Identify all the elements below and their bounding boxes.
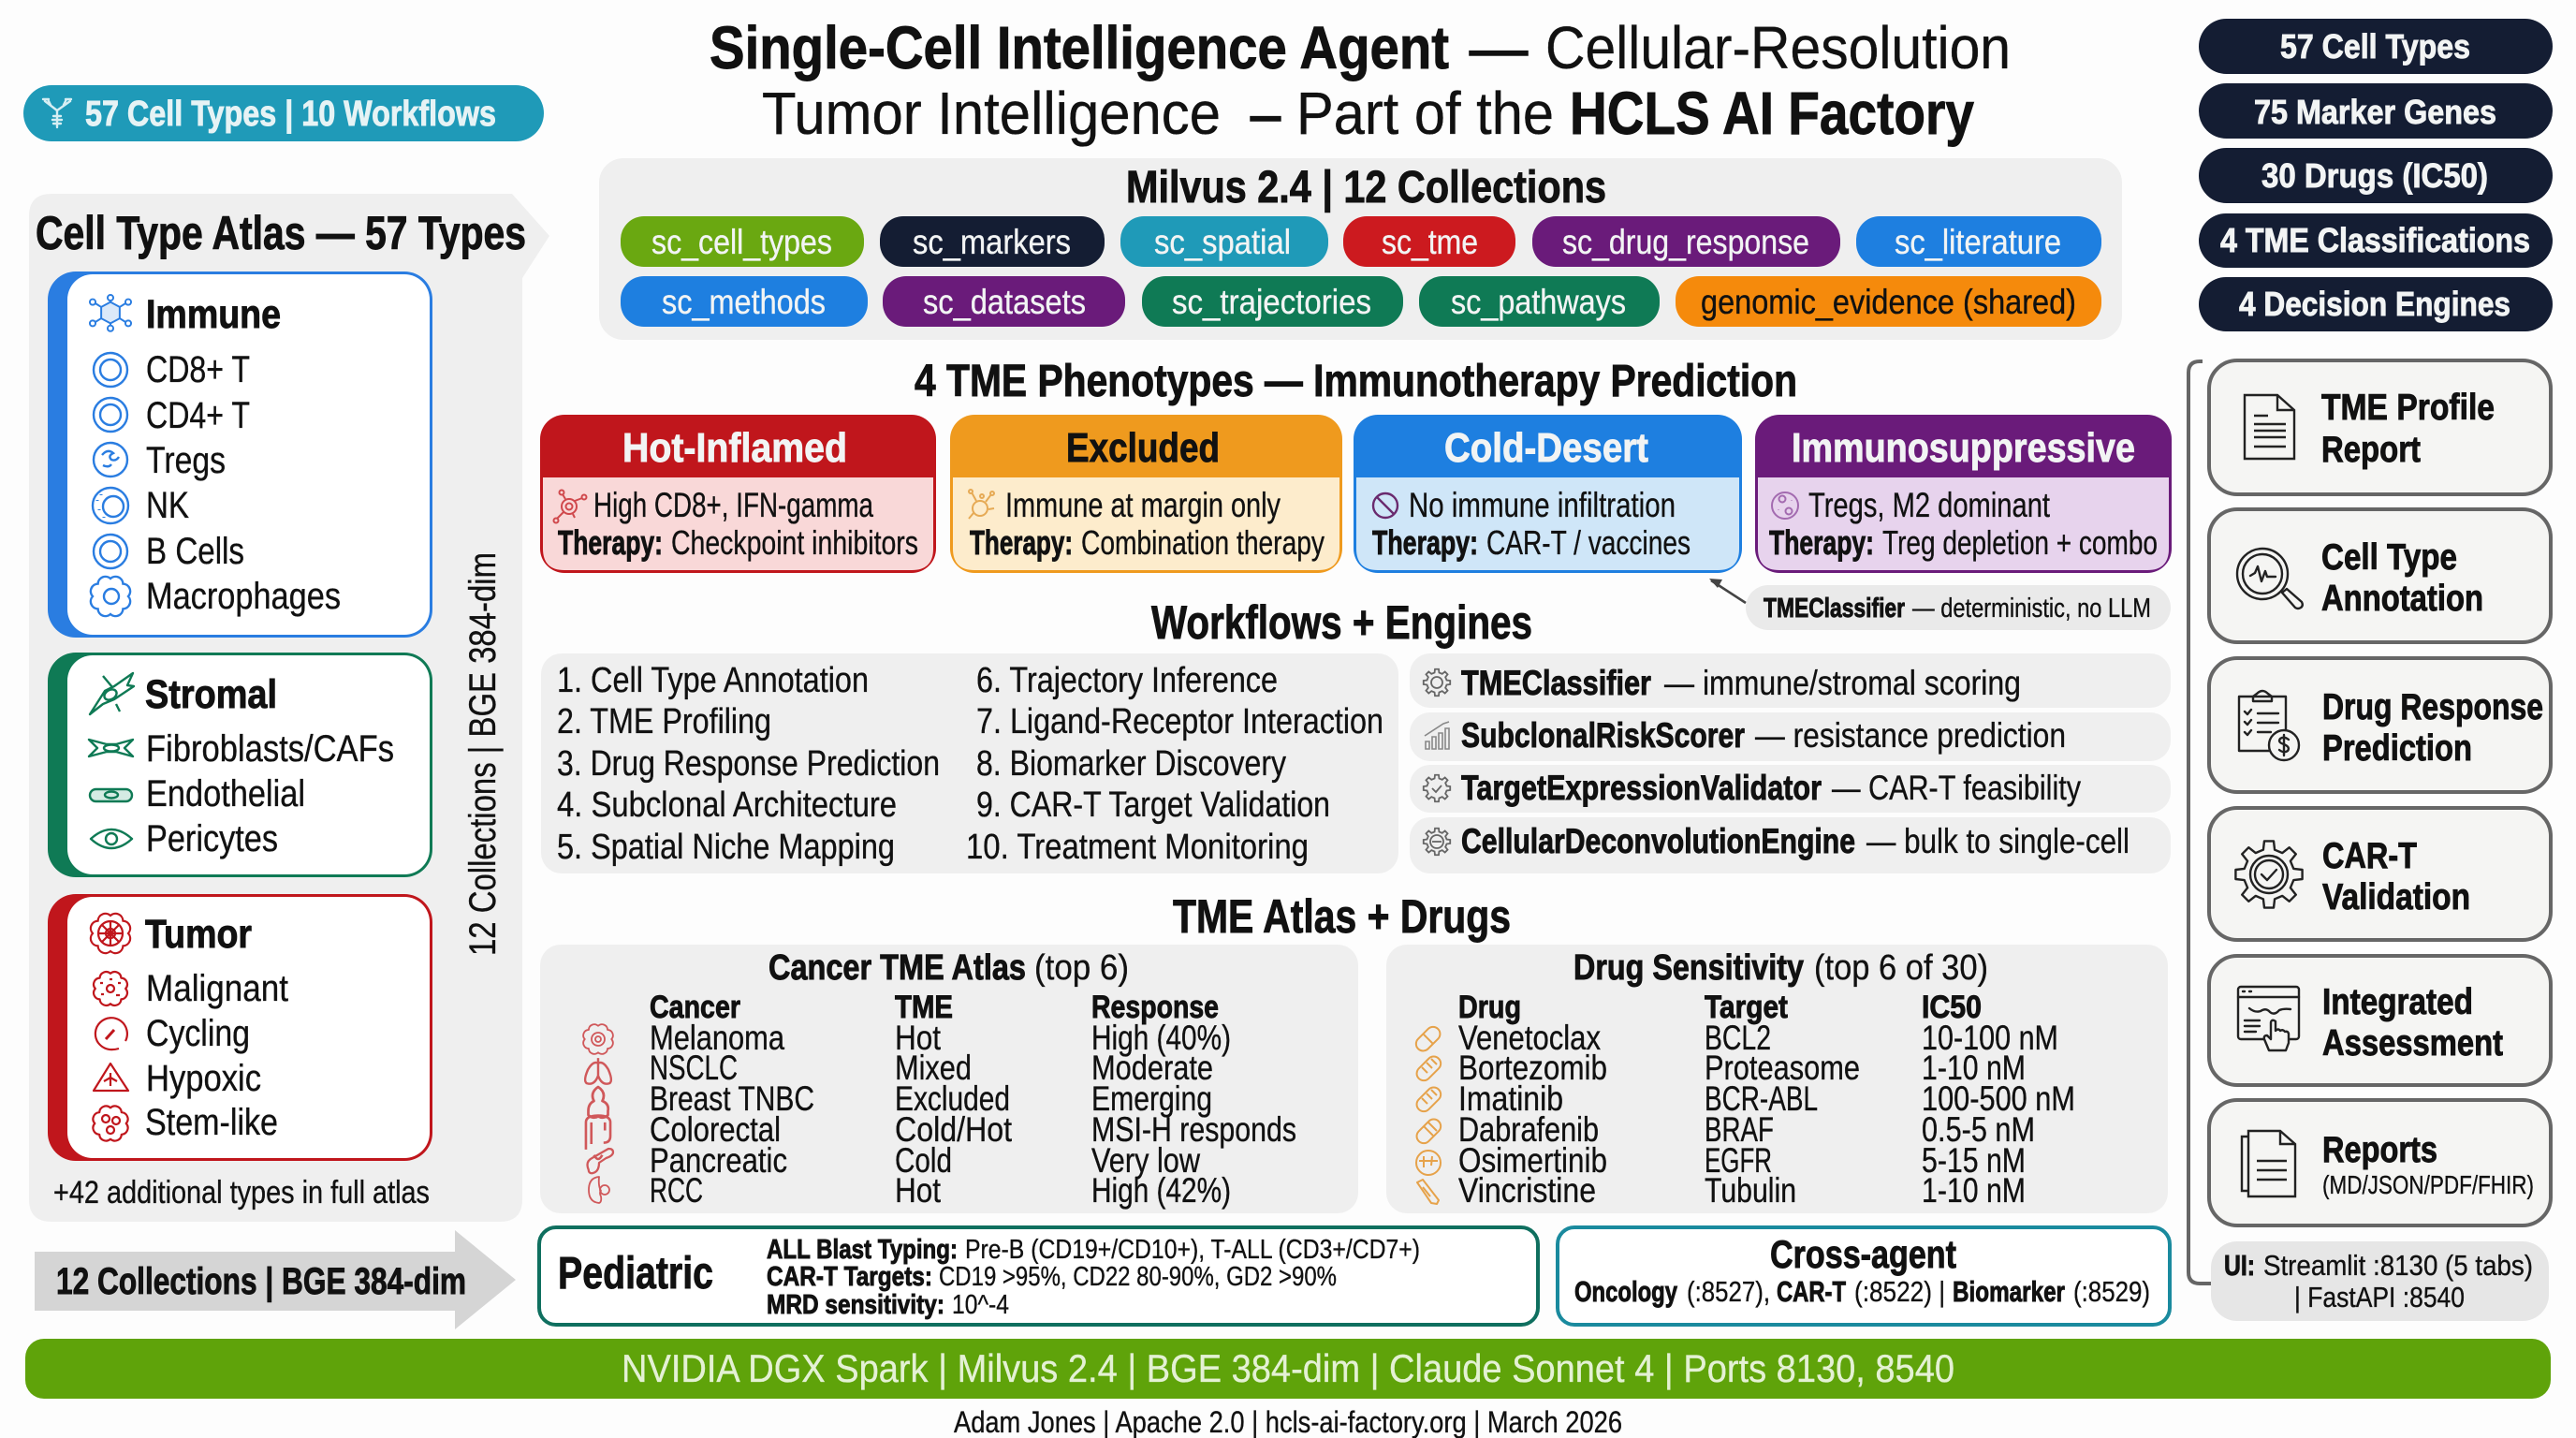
card: excluded: Combination therapy — [1081, 523, 1325, 562]
panel: workflows list: 8. Biomarker Discovery — [976, 744, 1286, 784]
table: cancer: High (40%) — [1091, 1019, 1231, 1057]
table: cancer: Hot — [895, 1019, 942, 1057]
table: cancer: Emerging — [1091, 1079, 1212, 1118]
panel: drug sensitivity: Drug Sensitivity — [1573, 948, 1804, 988]
card: cold-desert: No immune infiltration — [1409, 486, 1676, 524]
pill: UI ports: UI: — [2224, 1249, 2255, 1282]
panel: milvus collections — [599, 158, 2122, 340]
table: drugs: Osimertinib — [1458, 1141, 1607, 1180]
panel: cross-agent: Biomarker — [1953, 1275, 2065, 1308]
card: excluded — [950, 415, 1342, 573]
list: tumor cell types: Stem-like — [145, 1102, 278, 1143]
card: excluded: Immune at margin only — [1005, 486, 1281, 524]
table: drugs: 0.5-5 nM — [1922, 1110, 2035, 1149]
list: stromal cell types — [89, 728, 394, 859]
table: cancer: High (42%) — [1091, 1171, 1231, 1210]
card: immune: Immune — [146, 292, 281, 337]
engine: SubclonalRiskScorer: — resistance prediction — [1755, 716, 2066, 755]
icons: organs — [583, 1024, 613, 1203]
icon: inflamed cell — [554, 491, 586, 522]
panel: cancer TME atlas — [540, 945, 1358, 1213]
table: drugs: 5-15 nM — [1922, 1141, 2026, 1180]
pill: genomic_evidence: genomic_evidence (shared) — [1701, 283, 2076, 321]
bracket: outputs — [2188, 361, 2213, 1284]
panel: cross-agent: Cross-agent — [1770, 1232, 1956, 1276]
card: cold-desert: CAR-T / vaccines — [1486, 523, 1690, 562]
panel: workflows list: 5. Spatial Niche Mapping — [557, 828, 895, 867]
panel: workflows list: 4. Subclonal Architecture — [557, 785, 897, 825]
heading: TME phenotypes: 4 TME Phenotypes — Immunotherapy Prediction — [915, 357, 1797, 406]
callout: TMEClassifier: TMEClassifier — [1764, 594, 1905, 624]
table: cancer — [650, 990, 1296, 1210]
card: cell type annotation — [2209, 509, 2551, 642]
table: drugs: BCL2 — [1705, 1019, 1771, 1057]
icon: magnifier — [2237, 549, 2303, 609]
callout: TMEClassifier: — deterministic, no LLM — [1912, 594, 2151, 624]
panel: cross-agent: (:8522) | — [1854, 1275, 1945, 1308]
panel: drug sensitivity: (top 6 of 30) — [1814, 948, 1988, 988]
pill: sc_datasets — [883, 276, 1125, 327]
pill: genomic_evidence — [1676, 276, 2101, 327]
table: cancer: Cold — [895, 1141, 952, 1180]
table: drugs: BCR-ABL — [1705, 1079, 1818, 1118]
arrow: classifier to phenotypes — [1709, 579, 1746, 603]
card: hot-inflamed: Therapy: — [558, 523, 663, 562]
list: immune cell types: CD8+ T — [146, 349, 250, 390]
list: tumor cell types: Malignant — [146, 968, 288, 1009]
table: cancer: RCC — [650, 1171, 703, 1210]
table: cancer: Excluded — [895, 1079, 1010, 1118]
pill: sc_trajectories — [1142, 276, 1403, 327]
panel: workflows list: 10. Treatment Monitoring — [966, 828, 1309, 867]
table: drugs: Tubulin — [1705, 1171, 1796, 1210]
title: – — [1251, 80, 1281, 147]
heading: workflows and engines: Workflows + Engines — [1151, 596, 1532, 649]
table: drugs: 100-500 nM — [1922, 1079, 2075, 1118]
icon: stromal cell — [90, 673, 134, 714]
icon: stacked documents — [2242, 1131, 2295, 1196]
card: integrated assessment: Integrated — [2322, 982, 2473, 1022]
pill: UI ports: | FastAPI :8540 — [2294, 1281, 2465, 1313]
card: immunosuppressive: Treg depletion + combo — [1882, 523, 2158, 562]
panel: drug sensitivity — [1386, 945, 2168, 1213]
title: — — [1470, 14, 1528, 81]
card: tumor: Tumor — [145, 912, 252, 957]
list: tumor cell types: Cycling — [146, 1013, 250, 1054]
icon: document — [2245, 395, 2294, 459]
icon: immune cell — [90, 295, 131, 331]
card: CAR-T validation: Validation — [2322, 877, 2470, 917]
engine: CellularDeconvolutionEngine: — bulk to single-cell — [1866, 822, 2130, 860]
panel: pediatric: ALL Blast Typing: — [767, 1235, 958, 1265]
icon: tumor cell — [91, 914, 130, 953]
table: cancer: Breast TNBC — [650, 1079, 814, 1118]
pill: sc_literature — [1856, 216, 2101, 267]
card: hot-inflamed: High CD8+, IFN-gamma — [593, 486, 873, 524]
stat: decision engines: 4 Decision Engines — [2239, 285, 2510, 323]
engine: CellularDeconvolutionEngine — [1410, 817, 2171, 873]
table: drugs — [1458, 990, 2075, 1210]
card: TME profile report — [2209, 360, 2551, 494]
card: excluded: Excluded — [1066, 425, 1220, 471]
table: drugs: Bortezomib — [1458, 1049, 1607, 1087]
card: cell type annotation: Annotation — [2321, 579, 2483, 619]
table: drugs: EGFR — [1705, 1141, 1772, 1180]
stat: TME classifications — [2199, 213, 2553, 268]
pill: sc_drug_response — [1532, 216, 1840, 267]
card: tumor — [48, 894, 432, 1161]
card: stromal: Stromal — [145, 672, 277, 717]
list: immune cell types: Macrophages — [146, 576, 341, 617]
panel: workflows list — [541, 653, 1398, 873]
title: HCLS AI Factory — [1570, 80, 1974, 147]
panel: pediatric: MRD sensitivity: — [767, 1290, 944, 1320]
icon: excluded cell — [969, 490, 994, 519]
icon: branching cell — [43, 99, 71, 127]
card: cell type annotation: Cell Type — [2321, 537, 2457, 578]
callout: TMEClassifier — [1746, 585, 2171, 630]
panel: cross-agent — [1558, 1227, 2170, 1325]
panel: pediatric: Pediatric — [558, 1249, 713, 1299]
engine: SubclonalRiskScorer: SubclonalRiskScorer — [1461, 716, 1745, 755]
table: cancer: Moderate — [1091, 1049, 1213, 1087]
card: cold-desert: Cold-Desert — [1444, 425, 1648, 471]
engine: TMEClassifier: TMEClassifier — [1461, 664, 1651, 702]
panel: workflows list: 6. Trajectory Inference — [976, 661, 1278, 700]
panel: workflows list: 7. Ligand-Receptor Interaction — [976, 702, 1383, 741]
table: cancer: Melanoma — [650, 1019, 784, 1057]
title: Cellular-Resolution — [1545, 14, 2011, 81]
heading: TME atlas and drugs: TME Atlas + Drugs — [1173, 890, 1511, 943]
heading: cell type atlas: Cell Type Atlas — 57 Types — [36, 207, 526, 259]
card: immunosuppressive: Therapy: — [1769, 523, 1874, 562]
table: drugs: 1-10 nM — [1922, 1171, 2026, 1210]
footer bar — [25, 1339, 2551, 1399]
card: TME profile report: TME Profile — [2321, 388, 2495, 428]
panel: cancer TME atlas: (top 6) — [1034, 948, 1129, 988]
pill: UI ports: Streamlit :8130 (5 tabs) — [2263, 1249, 2533, 1282]
panel: pediatric: 10^-4 — [952, 1290, 1009, 1320]
table: drugs: IC50 — [1922, 990, 1982, 1025]
panel: cross-agent: (:8529) — [2073, 1275, 2150, 1308]
icon: no entry — [1373, 493, 1398, 518]
icon: clipboard with dollar — [2239, 691, 2299, 760]
card: immune — [48, 271, 432, 638]
pill: sc_markers — [880, 216, 1105, 267]
table: cancer: NSCLC — [650, 1049, 738, 1087]
table: cancer: MSI-H responds — [1091, 1110, 1296, 1149]
table: drugs: Dabrafenib — [1458, 1110, 1599, 1149]
pill: sc_spatial — [1120, 216, 1328, 267]
table: cancer: Hot — [895, 1171, 942, 1210]
list: tumor cell types: Hypoxic — [146, 1058, 261, 1099]
table: drugs: Target — [1705, 990, 1788, 1025]
list: stromal cell types: Endothelial — [146, 773, 305, 814]
engine: TargetExpressionValidator — [1410, 765, 2171, 813]
pill: sc_tme: sc_tme — [1382, 223, 1478, 261]
icon: suppressive cell — [1772, 492, 1798, 519]
panel: pediatric: Pre-B (CD19+/CD10+), T-ALL (CD3+/CD7+) — [965, 1235, 1420, 1265]
pill: sc_pathways — [1419, 276, 1660, 327]
engine: TMEClassifier — [1410, 653, 2171, 708]
card: cold-desert — [1354, 415, 1742, 573]
footer bar: NVIDIA DGX Spark | Milvus 2.4 | BGE 384-dim | Claude Sonnet 4 | Ports 8130, 8540 — [622, 1346, 1954, 1390]
panel: pediatric: CAR-T Targets: — [767, 1262, 932, 1292]
stat: cell types: 57 Cell Types — [2280, 27, 2470, 66]
badge: 57 cell types, 10 workflows: 57 Cell Types | 10 Workflows — [85, 95, 496, 134]
stat: drugs: 30 Drugs (IC50) — [2261, 156, 2488, 195]
table: drugs: Drug — [1458, 990, 1521, 1025]
card: immunosuppressive — [1755, 415, 2172, 573]
card: CAR-T validation: CAR-T — [2322, 836, 2417, 876]
pill: sc_methods: sc_methods — [662, 283, 826, 321]
card: cold-desert: Therapy: — [1372, 523, 1478, 562]
panel: workflows list: 2. TME Profiling — [557, 702, 771, 741]
card: excluded: Therapy: — [970, 523, 1073, 562]
card: integrated assessment: Assessment — [2322, 1023, 2503, 1064]
panel: pediatric: CD19 >95%, CD22 80-90%, GD2 >90% — [939, 1262, 1337, 1292]
card: drug response prediction — [2209, 658, 2551, 792]
table: cancer: TME — [895, 990, 953, 1025]
card: hot-inflamed: Hot-Inflamed — [622, 425, 847, 471]
table: drugs: BRAF — [1705, 1110, 1774, 1149]
stat: drugs — [2199, 148, 2553, 203]
badge: 57 cell types, 10 workflows — [23, 85, 544, 141]
panel: cross-agent: (:8527), — [1687, 1275, 1770, 1308]
vertical label: collections: 12 Collections | BGE 384-dim — [462, 552, 504, 956]
list: immune cell types: NK — [146, 485, 189, 526]
card: TME profile report: Report — [2321, 430, 2421, 470]
pill: sc_datasets: sc_datasets — [923, 283, 1086, 321]
list: stromal cell types: Pericytes — [146, 818, 278, 859]
pill: sc_trajectories: sc_trajectories — [1172, 283, 1371, 321]
pill: sc_tme — [1343, 216, 1515, 267]
list: tumor cell types — [93, 968, 288, 1143]
pill: sc_methods — [621, 276, 868, 327]
list: immune cell types: B Cells — [146, 531, 244, 572]
table: drugs: Venetoclax — [1458, 1019, 1601, 1057]
title: Tumor Intelligence — [762, 80, 1221, 147]
table: drugs: Imatinib — [1458, 1079, 1563, 1118]
card: immunosuppressive: Immunosuppressive — [1792, 425, 2135, 471]
card: CAR-T validation — [2209, 808, 2551, 940]
icon: gear with check — [2235, 841, 2303, 908]
stat: marker genes: 75 Marker Genes — [2254, 93, 2496, 131]
arrow: collections to pediatric — [35, 1230, 516, 1329]
card: drug response prediction: Prediction — [2322, 728, 2472, 769]
table: drugs: Vincristine — [1458, 1171, 1596, 1210]
table: drugs: 10-100 nM — [1922, 1019, 2058, 1057]
engine: TargetExpressionValidator: — CAR-T feasibility — [1832, 769, 2081, 807]
panel: cell type atlas — [29, 194, 549, 1222]
pill: sc_cell_types: sc_cell_types — [651, 223, 832, 261]
icon: dashboard with hand — [2238, 987, 2299, 1050]
pill: sc_markers: sc_markers — [913, 223, 1071, 261]
card: immunosuppressive: Tregs, M2 dominant — [1808, 486, 2051, 524]
panel: workflows list: 1. Cell Type Annotation — [557, 661, 869, 700]
arrow: collections to pediatric: 12 Collections | BGE 384-dim — [56, 1261, 466, 1302]
icons: drugs — [1413, 1024, 1443, 1204]
title: Single-Cell Intelligence Agent — [710, 14, 1449, 81]
card: integrated assessment — [2209, 956, 2551, 1085]
pill: UI ports — [2211, 1241, 2549, 1321]
card: stromal — [48, 653, 432, 877]
card: hot-inflamed: Checkpoint inhibitors — [671, 523, 918, 562]
table: cancer: Very low — [1091, 1141, 1200, 1180]
table: cancer: Mixed — [895, 1049, 972, 1087]
list: immune cell types — [91, 349, 341, 617]
panel: cancer TME atlas: Cancer TME Atlas — [768, 948, 1026, 988]
table: cancer: Response — [1091, 990, 1219, 1025]
table: drugs: Proteasome — [1705, 1049, 1860, 1087]
engine: CellularDeconvolutionEngine: CellularDeconvolutionEngine — [1461, 822, 1855, 860]
table: cancer: Colorectal — [650, 1110, 781, 1149]
pill: sc_cell_types — [621, 216, 864, 267]
engine: TargetExpressionValidator: TargetExpressionValidator — [1461, 769, 1822, 807]
heading: milvus: Milvus 2.4 | 12 Collections — [1126, 163, 1606, 213]
engine: TMEClassifier: — immune/stromal scoring — [1664, 664, 2021, 702]
table: cancer: Pancreatic — [650, 1141, 787, 1180]
card: hot-inflamed — [540, 415, 936, 573]
list: immune cell types: Tregs — [146, 440, 226, 481]
stats column — [2199, 19, 2553, 331]
title: Part of the — [1296, 80, 1554, 147]
engine: SubclonalRiskScorer — [1410, 712, 2171, 761]
pill: sc_pathways: sc_pathways — [1451, 283, 1626, 321]
panel: cross-agent: CAR-T — [1777, 1275, 1846, 1308]
stat: decision engines — [2199, 277, 2553, 331]
table: drugs: 1-10 nM — [1922, 1049, 2026, 1087]
pill: sc_spatial: sc_spatial — [1154, 223, 1291, 261]
stat: TME classifications: 4 TME Classifications — [2220, 221, 2530, 259]
card: reports: Reports — [2322, 1130, 2437, 1170]
note: additional types: +42 additional types in full atlas — [53, 1175, 430, 1211]
panel: workflows list: 9. CAR-T Target Validation — [976, 785, 1330, 825]
pill: sc_literature: sc_literature — [1895, 223, 2061, 261]
panel: pediatric — [539, 1227, 1538, 1325]
card: reports — [2209, 1100, 2551, 1225]
pill: sc_drug_response: sc_drug_response — [1562, 223, 1809, 261]
credit line: Adam Jones | Apache 2.0 | hcls-ai-factory.org | March 2026 — [954, 1405, 1622, 1438]
panel: workflows list: 3. Drug Response Prediction — [557, 744, 940, 784]
table: cancer: Cancer — [650, 990, 740, 1025]
stat: cell types — [2199, 19, 2553, 74]
list: stromal cell types: Fibroblasts/CAFs — [146, 728, 394, 770]
panel: cross-agent: Oncology — [1574, 1275, 1678, 1308]
list: immune cell types: CD4+ T — [146, 395, 250, 436]
title — [710, 14, 2011, 147]
table: cancer: Cold/Hot — [895, 1110, 1013, 1149]
stat: marker genes — [2199, 83, 2553, 139]
